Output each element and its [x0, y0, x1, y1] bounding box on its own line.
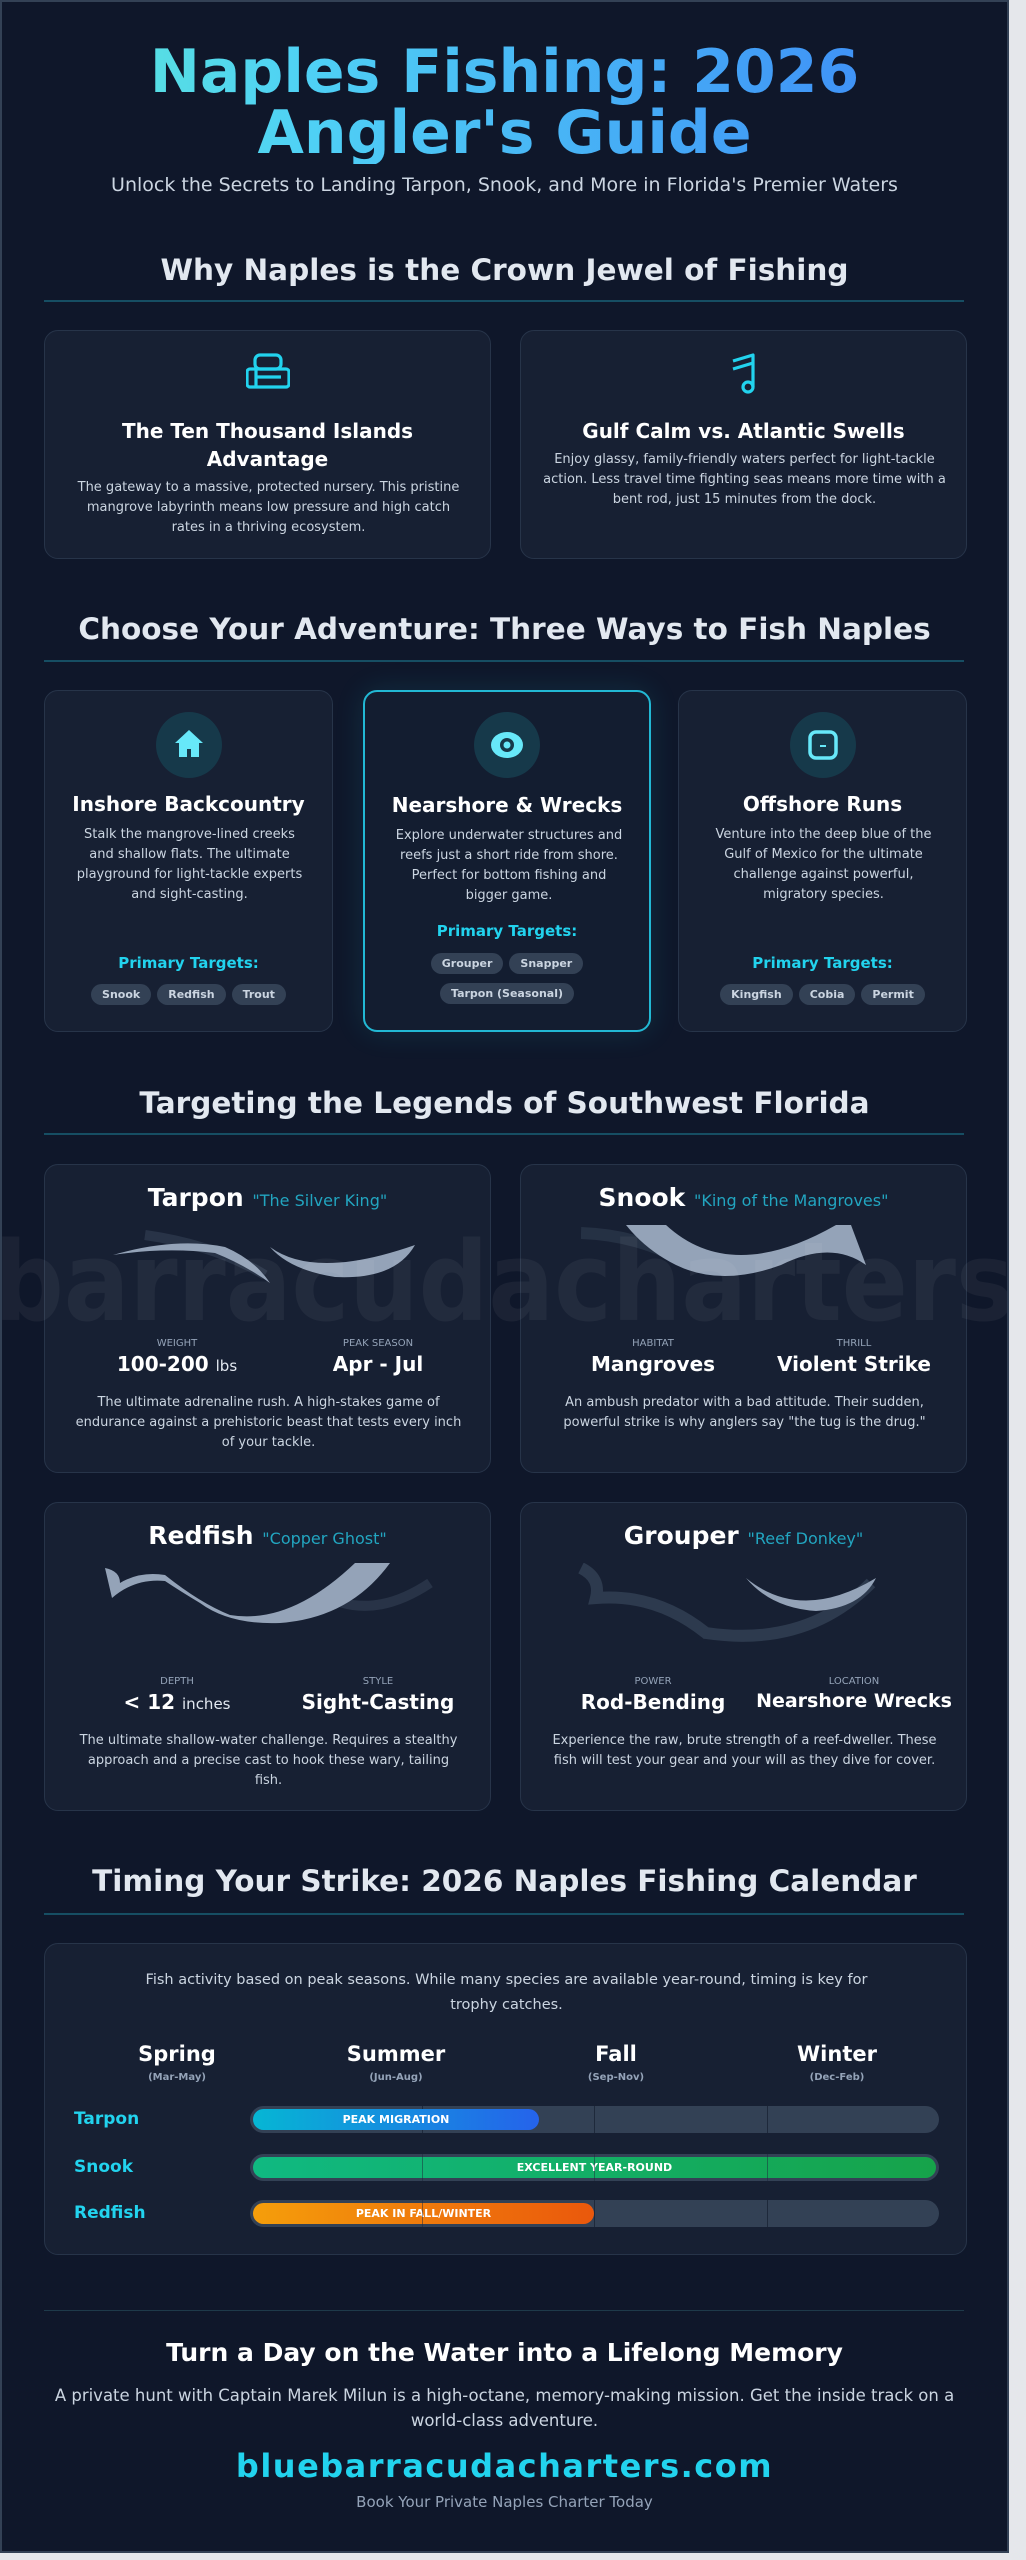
icon: fish tarpon	[114, 1230, 415, 1283]
stat style: STYLE	[363, 1676, 393, 1687]
footer sub: Book Your Private Naples Charter Today	[356, 2493, 653, 2511]
season headers: (Jun-Aug)	[369, 2072, 423, 2083]
panel: calendar	[44, 1943, 967, 2255]
card text: Stalk the mangrove-lined creeks and shallow flats. The ultimate playground for light-tackle experts and sight-casting.	[77, 827, 302, 902]
row: snook: EXCELLENT YEAR-ROUND	[517, 2161, 672, 2174]
heading: choose adventure: Choose Your Adventure: Three Ways to Fish Naples	[78, 612, 931, 646]
card text: Venture into the deep blue of the Gulf of Mexico for the ultimate challenge against powerful, migratory species.	[715, 827, 932, 902]
icon: box	[790, 712, 856, 778]
panel: tarpon	[44, 1164, 491, 1473]
panel: inshore	[44, 690, 333, 1032]
panel: ten thousand islands	[44, 330, 491, 559]
card text: Enjoy glassy, family-friendly waters perfect for light-tackle action. Less travel time fighting seas means more time with a bent rod, just 15 minutes from the dock.	[543, 452, 946, 507]
season headers: Winter	[797, 2042, 877, 2066]
panel: grouper: Nearshore Wrecks	[756, 1690, 952, 1712]
icon: music note	[732, 353, 755, 394]
panel: offshore: Kingfish	[731, 988, 782, 1001]
panel: offshore: Permit	[872, 988, 914, 1001]
panel: tarpon: 100-200 lbs	[117, 1352, 237, 1376]
fish title: Grouper "Reef Donkey"	[624, 1521, 863, 1550]
icon: eye	[474, 712, 540, 778]
fish text: The ultimate shallow-water challenge. Requires a stealthy approach and a precise cast to hook these wary, tailing fish.	[80, 1733, 457, 1788]
panel: grouper	[520, 1502, 967, 1811]
row: tarpon: PEAK MIGRATION	[343, 2113, 449, 2126]
panel: redfish	[44, 1502, 491, 1811]
fish title: Snook "King of the Mangroves"	[599, 1183, 888, 1212]
icon: fish grouper	[578, 1563, 876, 1642]
icon: islands	[246, 353, 290, 389]
panel: snook: Violent Strike	[777, 1352, 931, 1376]
row: redfish: Redfish	[74, 2203, 146, 2223]
panel: inshore: Redfish	[168, 988, 215, 1001]
stat weight: WEIGHT	[157, 1338, 197, 1349]
card text: The gateway to a massive, protected nursery. This pristine mangrove labyrinth means low pressure and high catch rates in a thriving ecosystem.	[78, 480, 459, 535]
stat depth: DEPTH	[160, 1676, 194, 1687]
row: redfish: PEAK IN FALL/WINTER	[356, 2207, 491, 2220]
row: snook	[74, 2154, 939, 2181]
subtitle: Unlock the Secrets to Landing Tarpon, Snook, and More in Florida's Premier Waters	[111, 174, 898, 196]
heading: legends: Targeting the Legends of Southwest Florida	[139, 1086, 870, 1120]
panel: snook: Mangroves	[591, 1352, 715, 1376]
icon: fish redfish	[105, 1563, 432, 1624]
stat location: LOCATION	[829, 1676, 879, 1687]
panel: inshore: Trout	[243, 988, 275, 1001]
targets: Primary Targets:	[752, 954, 893, 972]
season headers	[138, 2042, 877, 2083]
card title: Gulf Calm vs. Atlantic Swells	[582, 419, 905, 443]
card title: The Ten Thousand Islands	[122, 419, 413, 443]
fish text: Experience the raw, brute strength of a reef-dweller. These fish will test your gear and your will as they dive for cover.	[552, 1733, 937, 1768]
panel: inshore: Snook	[102, 988, 140, 1001]
row: snook: Snook	[74, 2157, 133, 2177]
panel: tarpon: Apr - Jul	[333, 1352, 423, 1376]
panel: nearshore: Grouper	[442, 957, 492, 970]
footer title: Turn a Day on the Water into a Lifelong Memory	[166, 2338, 843, 2367]
targets: Primary Targets:	[437, 922, 577, 940]
card title: Offshore Runs	[743, 792, 902, 816]
row: redfish	[74, 2200, 939, 2227]
row: tarpon	[74, 2106, 939, 2133]
panel: redfish: < 12 inches	[124, 1690, 230, 1714]
icon: house	[156, 712, 222, 778]
title	[2, 42, 1007, 164]
title: Naples Fishing: 2026	[150, 37, 859, 107]
panel: snook	[520, 1164, 967, 1473]
panel: redfish: Sight-Casting	[302, 1690, 454, 1714]
card title: Nearshore & Wrecks	[392, 793, 622, 817]
card title: Advantage	[207, 447, 328, 471]
heading: why naples: Why Naples is the Crown Jewel of Fishing	[160, 253, 849, 287]
stat season: PEAK SEASON	[343, 1338, 413, 1349]
url: bluebarracudacharters.com	[236, 2447, 773, 2485]
calendar intro: Fish activity based on peak seasons. While many species are available year-round, timing is key for trophy catches.	[146, 1972, 867, 2013]
season headers: (Dec-Feb)	[810, 2072, 864, 2083]
panel: nearshore: Snapper	[520, 957, 572, 970]
title: Angler's Guide	[257, 98, 752, 168]
fish title: Redfish "Copper Ghost"	[148, 1521, 387, 1550]
stat habitat: HABITAT	[632, 1338, 674, 1349]
panel: nearshore: Tarpon (Seasonal)	[451, 987, 563, 1000]
footer text: A private hunt with Captain Marek Milun is a high-octane, memory-making mission. Get the inside track on a world-class adventure.	[55, 2386, 954, 2430]
season headers: (Sep-Nov)	[588, 2072, 644, 2083]
season headers: (Mar-May)	[148, 2072, 206, 2083]
panel: offshore	[678, 690, 967, 1032]
season headers: Fall	[595, 2042, 637, 2066]
fish text: The ultimate adrenaline rush. A high-stakes game of endurance against a prehistoric beast that tests every inch of your tackle.	[76, 1395, 461, 1450]
panel: gulf calm	[520, 330, 967, 559]
stat power: POWER	[634, 1676, 672, 1687]
season headers: Summer	[347, 2042, 445, 2066]
panel: grouper: Rod-Bending	[581, 1690, 725, 1714]
fish text: An ambush predator with a bad attitude. Their sudden, powerful strike is why anglers say "the tug is the drug."	[563, 1395, 926, 1430]
row: tarpon: Tarpon	[74, 2109, 139, 2129]
heading: calendar: Timing Your Strike: 2026 Naples Fishing Calendar	[92, 1864, 917, 1898]
season headers: Spring	[138, 2042, 216, 2066]
card text: Explore underwater structures and reefs just a short ride from shore. Perfect for bottom fishing and bigger game.	[396, 828, 622, 903]
icon: fish snook	[581, 1225, 866, 1276]
panel: offshore: Cobia	[810, 988, 844, 1001]
fish title: Tarpon "The Silver King"	[148, 1183, 387, 1212]
targets: Primary Targets:	[118, 954, 259, 972]
card title	[122, 419, 413, 471]
stat thrill: THRILL	[837, 1338, 871, 1349]
panel: nearshore	[363, 690, 651, 1032]
card title: Inshore Backcountry	[72, 792, 305, 816]
